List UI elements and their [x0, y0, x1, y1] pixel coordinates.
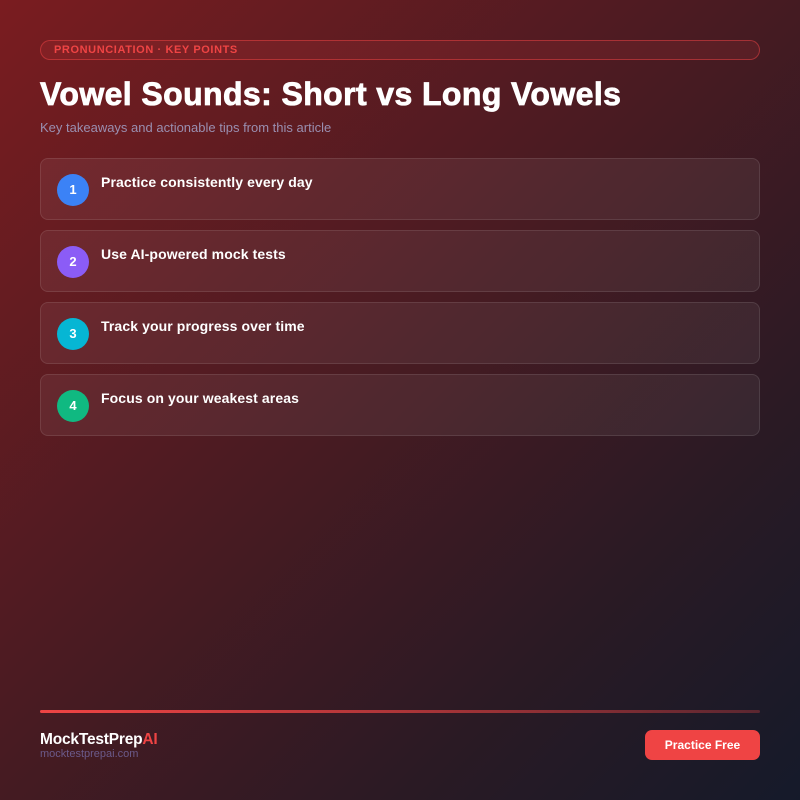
- text 3: Track your progress over time: [101, 318, 305, 334]
- badge 1: 1: [69, 182, 77, 197]
- category tag: [40, 40, 760, 60]
- badge 1: [57, 174, 89, 206]
- text 1: Practice consistently every day: [101, 174, 313, 190]
- badge 3: [57, 318, 89, 350]
- category tag: PRONUNCIATION · KEY POINTS: [54, 44, 238, 56]
- badge 2: [57, 246, 89, 278]
- text 2: Use AI-powered mock tests: [101, 246, 286, 262]
- cta button: [645, 730, 760, 760]
- badge 4: 4: [69, 398, 77, 413]
- subtitle: Key takeaways and actionable tips from this article: [40, 120, 331, 135]
- card 3: [40, 302, 760, 364]
- card 2: [40, 230, 760, 292]
- badge 3: 3: [69, 326, 77, 341]
- text 4: Focus on your weakest areas: [101, 390, 299, 406]
- cta button: Practice Free: [665, 738, 740, 752]
- url: mocktestprepai.com: [40, 748, 138, 760]
- brand: MockTestPrepAI: [40, 731, 158, 748]
- badge 4: [57, 390, 89, 422]
- badge 2: 2: [69, 254, 77, 269]
- card 4: [40, 374, 760, 436]
- title: Vowel Sounds: Short vs Long Vowels: [40, 76, 621, 112]
- card 1: [40, 158, 760, 220]
